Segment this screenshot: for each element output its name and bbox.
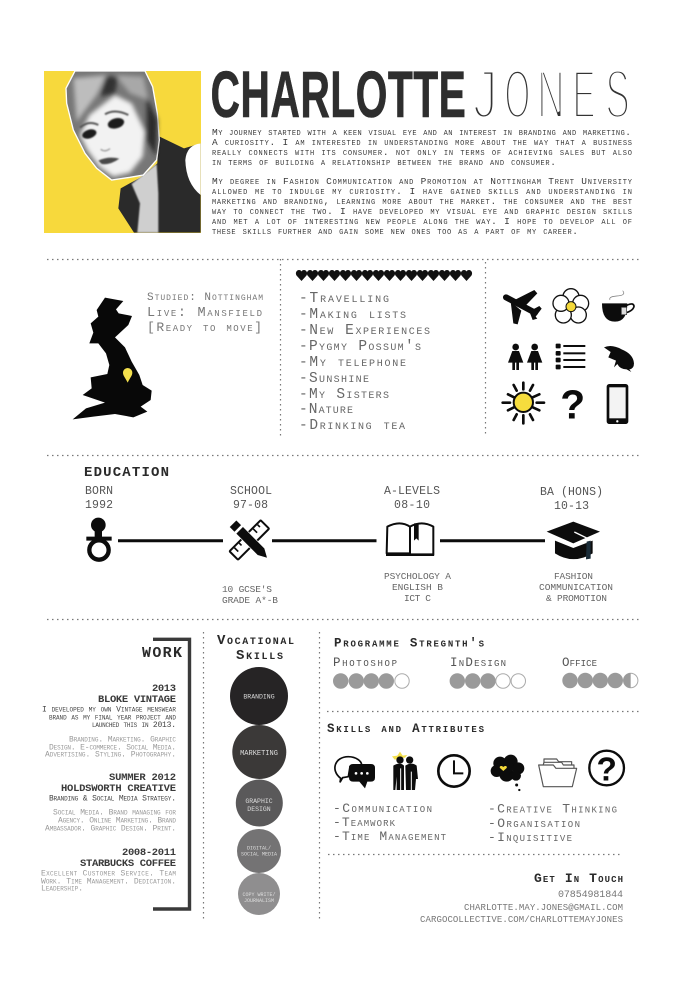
interests list: -Pygmy Possum's xyxy=(299,339,421,355)
vocational skill circles: DESIGN xyxy=(247,806,271,813)
icon: thought cloud with heart xyxy=(491,755,524,791)
programme ratings xyxy=(333,656,638,689)
vocational skill circles xyxy=(230,667,288,915)
education stages xyxy=(85,485,603,513)
work entries: I developed my own Vintage menswear xyxy=(42,706,176,714)
intro text: these skills further and gain some new ones too as a part of my career. xyxy=(212,226,578,237)
location text: Live: Mansfield xyxy=(147,306,262,321)
vocational skill circles: MARKETING xyxy=(240,750,278,758)
skills list: -Organisation xyxy=(488,816,580,831)
work entries: STARBUCKS COFFEE xyxy=(80,858,176,870)
interests list: -New Experiences xyxy=(299,323,430,339)
title: J xyxy=(473,56,497,133)
work entries: Agency. Online Marketing. Brand xyxy=(58,816,176,826)
skills list xyxy=(333,801,617,845)
contact block: Get In Touch xyxy=(534,871,623,886)
icon: plane xyxy=(506,290,542,324)
education stages: 08-10 xyxy=(394,499,430,512)
intro text: allowed me to indulge my curiosity. I have gained skills and understanding in xyxy=(212,186,632,197)
icon: graduation cap xyxy=(547,522,600,559)
programme ratings: Photoshop xyxy=(333,656,397,670)
education stages: 10-13 xyxy=(554,500,589,513)
work entries: Advertising. Styling. Photography. xyxy=(45,750,176,760)
timeline lines xyxy=(118,539,545,542)
vocational skill circles: SOCIAL MEDIA xyxy=(241,852,277,858)
icon: question in circle: ? xyxy=(596,752,617,789)
education details: & PROMOTION xyxy=(546,593,607,604)
icon: pygmy possum xyxy=(604,346,634,372)
education details xyxy=(222,571,613,606)
education details: FASHION xyxy=(554,571,593,582)
vocational skills heading: Vocational xyxy=(217,633,294,649)
education stages: 97-08 xyxy=(233,499,268,512)
head silhouette xyxy=(66,71,159,180)
title: N xyxy=(537,56,565,133)
contact block: CARGOCOLLECTIVE.COM/CHARLOTTEMAYJONES xyxy=(420,915,623,925)
icon: folder xyxy=(539,759,577,787)
education details: COMMUNICATION xyxy=(539,582,613,593)
work entries: Ambassador. Graphic Design. Print. xyxy=(45,824,176,834)
title xyxy=(210,56,630,133)
work entries: HOLDSWORTH CREATIVE xyxy=(61,783,176,795)
intro text: My degree in Fashion Communication and Promotion at Nottingham Trent University xyxy=(212,176,633,187)
clothing xyxy=(118,136,201,233)
neck and chest xyxy=(132,164,158,233)
icon: phone xyxy=(607,384,628,424)
work entries: 2008-2011 xyxy=(122,847,176,859)
education details: PSYCHOLOGY A xyxy=(384,571,451,582)
intro text: A curiosity. I am interested in understanding more about the way that a business xyxy=(212,137,632,148)
location text: [Ready to move] xyxy=(147,320,262,335)
photo: portrait on yellow square xyxy=(44,71,201,233)
intro text: marketing and branding, learning more about the market. the consumer and the best xyxy=(212,196,632,207)
work entries: launched this in 2013. xyxy=(92,721,176,730)
icon: teamwork figures xyxy=(392,752,418,790)
education stages: A-LEVELS xyxy=(384,485,440,498)
work entries: brand as my final year project and xyxy=(49,714,176,722)
icon: speech bubbles xyxy=(335,757,375,788)
vocational skills heading: Skills xyxy=(236,648,283,664)
interests list: -My telephone xyxy=(299,355,406,371)
interests list: -My Sisters xyxy=(299,387,389,403)
icon: question mark: ? xyxy=(560,382,585,428)
interests list: -Nature xyxy=(299,402,353,418)
contact block: 07854981844 xyxy=(558,890,623,901)
work entries: Social Media. Brand managing for xyxy=(53,808,176,818)
vocational skill circles: GRAPHIC xyxy=(245,798,273,805)
work bracket xyxy=(153,639,190,909)
work entries: Design. E-commerce. Social Media. xyxy=(49,744,176,752)
vocational skill circles: COPY WRITE/ xyxy=(242,892,276,898)
skills list: -Communication xyxy=(333,801,432,816)
interests list: -Drinking tea xyxy=(299,418,405,434)
icon: clock xyxy=(438,755,470,787)
education details: ENGLISH B xyxy=(392,582,443,593)
icon: tea cup xyxy=(602,291,634,322)
skills list: -Time Management xyxy=(333,829,447,844)
interests list xyxy=(299,291,430,434)
interest icons xyxy=(503,289,634,428)
skills icons xyxy=(335,751,624,791)
vocational skill circles: DIGITAL/ xyxy=(247,846,271,852)
intro text: and met a lot of interesting new people along the way. I hope to develop all of xyxy=(212,216,632,227)
work entries: Branding & Social Media Strategy. xyxy=(49,794,176,804)
skills list: -Teamwork xyxy=(333,815,396,830)
intro text: My journey started with a keen visual eye and an interest in branding and marketing. xyxy=(212,127,631,138)
eyes and mouth xyxy=(80,111,128,164)
work entries: Excellent Customer Service. Team xyxy=(41,870,176,878)
work entries: SUMMER 2012 xyxy=(109,772,176,784)
shoulder xyxy=(185,143,201,195)
education heading: EDUCATION xyxy=(84,465,169,481)
interests list: -Travelling xyxy=(299,291,389,307)
vocational skill circles: JOURNALISM xyxy=(244,898,274,904)
icon: pacifier xyxy=(86,518,112,560)
map pin xyxy=(123,368,132,383)
hearts row xyxy=(296,270,472,281)
vocational skill circles: BRANDING xyxy=(243,694,275,700)
title: S xyxy=(605,56,630,133)
education stages: 1992 xyxy=(85,499,113,512)
programme ratings: Office xyxy=(562,656,597,670)
education stages: BORN xyxy=(85,485,113,498)
education details: ICT C xyxy=(404,593,431,604)
education stages: BA (HONS) xyxy=(540,486,603,499)
face xyxy=(80,95,145,177)
contact block xyxy=(420,871,623,925)
title: E xyxy=(572,56,596,133)
location text xyxy=(147,292,263,335)
skills list: -Creative Thinking xyxy=(488,802,617,816)
interests list: -Sunshine xyxy=(299,371,369,387)
work entries: 2013 xyxy=(152,683,176,695)
interests list: -Making lists xyxy=(299,307,406,323)
skills heading: Skills and Attributes xyxy=(327,722,485,736)
location text: Studied: Nottingham xyxy=(147,292,263,304)
skills list: -Inquisitive xyxy=(488,830,572,845)
intro text xyxy=(212,127,633,237)
work entries: Branding. Marketing. Graphic xyxy=(69,736,176,744)
vocational skills heading xyxy=(217,633,294,664)
education details: 10 GCSE'S xyxy=(222,584,272,595)
hair streaks xyxy=(73,75,157,157)
education details: GRADE A*-B xyxy=(222,595,278,606)
icon: sun xyxy=(503,383,544,423)
map of UK xyxy=(73,298,152,419)
programme ratings: InDesign xyxy=(450,656,506,670)
title: O xyxy=(504,57,530,133)
work entries: Work. Time Management. Dedication. xyxy=(41,878,176,886)
intro text: really connects with its consumer. not only in terms of achieving sales but also xyxy=(212,147,632,158)
programme strengths heading: Programme Stregnth's xyxy=(334,636,485,650)
contact block: CHARLOTTE.MAY.JONES@GMAIL.COM xyxy=(464,903,623,913)
icon: ruler and pencil xyxy=(229,520,271,562)
work entries: Leadership. xyxy=(41,884,83,894)
education stages: SCHOOL xyxy=(230,485,272,498)
work heading: WORK xyxy=(142,645,182,662)
icon: list xyxy=(556,344,585,369)
icon: open book xyxy=(386,523,434,555)
icon: question in circle xyxy=(589,751,624,789)
intro text: way to connect the two. I have developed my visual eye and graphic design skills xyxy=(212,206,632,217)
icon: two women xyxy=(508,344,542,370)
title: CHARLOTTE xyxy=(210,57,466,131)
dividers xyxy=(47,259,641,920)
work entries: BLOKE VINTAGE xyxy=(98,694,176,706)
work entries xyxy=(41,683,176,894)
icon: flower xyxy=(553,289,589,323)
intro text: in terms of building a relationship between the brand and consumer. xyxy=(212,157,556,168)
